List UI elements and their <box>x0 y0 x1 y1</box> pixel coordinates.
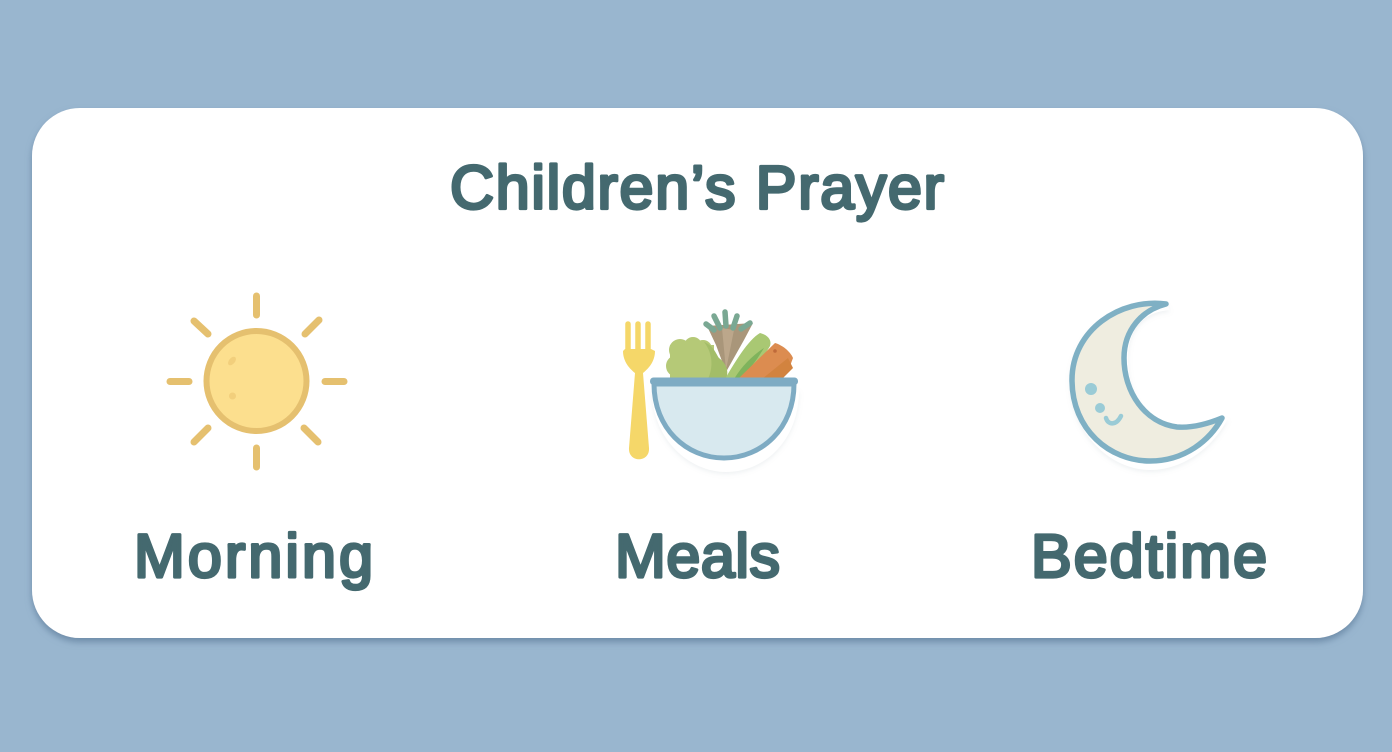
icon: fork and salad bowl <box>623 312 799 472</box>
green lettuce <box>666 337 727 379</box>
green leaf <box>725 333 771 379</box>
panel: white card <box>32 108 1363 638</box>
fork <box>623 324 655 459</box>
bowl rim <box>650 378 798 385</box>
title: Children’s Prayer <box>450 154 944 222</box>
carrots <box>738 343 793 379</box>
icon: crescent moon <box>1070 302 1228 470</box>
label: Bedtime: Bedtime <box>1031 522 1267 590</box>
moon face <box>1085 383 1121 423</box>
icon: sun <box>170 296 344 467</box>
bowl body <box>654 384 794 458</box>
sticker outline <box>652 390 799 472</box>
brown leaf vegetable <box>706 312 753 372</box>
label: Meals: Meals <box>615 522 780 590</box>
label: Morning: Morning <box>134 522 373 590</box>
